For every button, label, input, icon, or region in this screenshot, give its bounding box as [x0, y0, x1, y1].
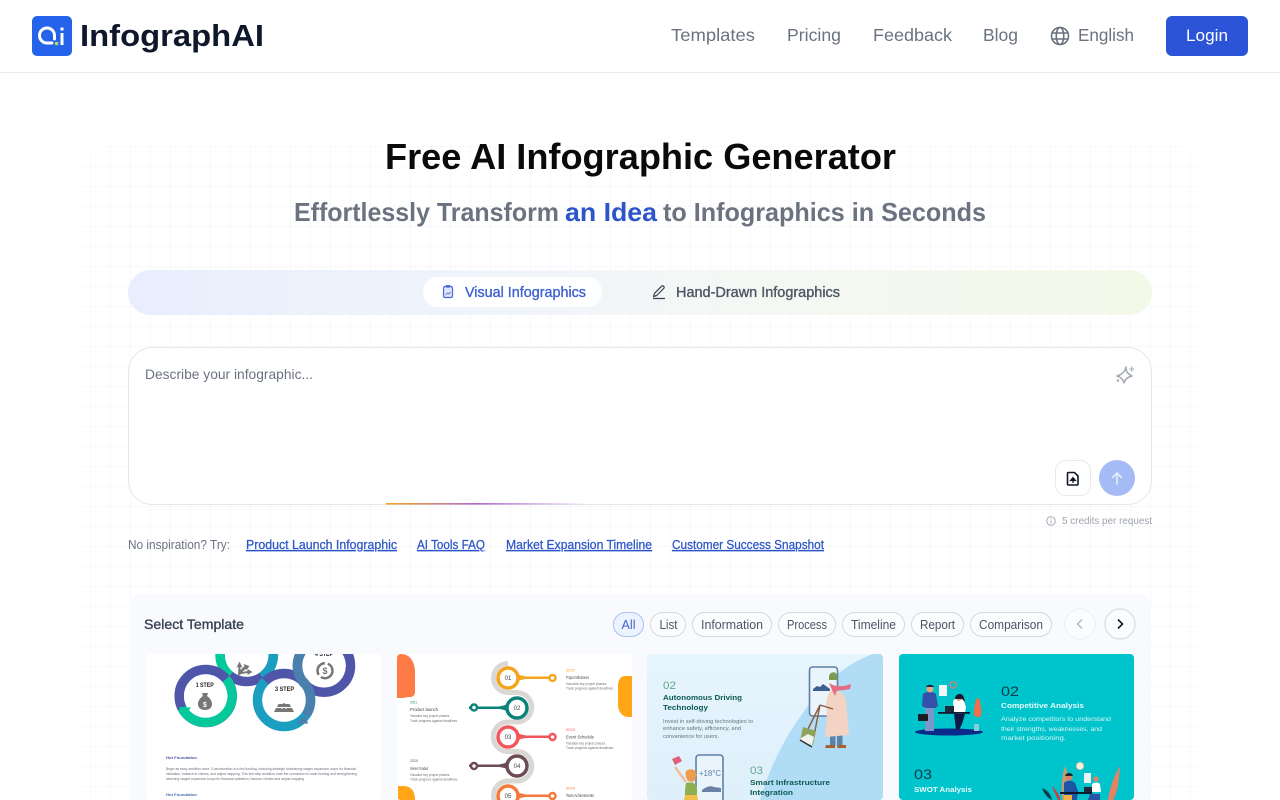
timeline labels — [410, 668, 614, 798]
node 05: 05 — [505, 794, 512, 800]
body text — [166, 756, 357, 797]
timeline labels: Visualize key project phases. — [566, 682, 607, 686]
body text: Hot Foundation — [166, 756, 197, 760]
category filters: Report — [920, 618, 955, 632]
section 02 text: enhance safety, efficiency, and — [663, 726, 741, 732]
step labels: 3 STEP — [275, 686, 295, 693]
section 02 text — [1001, 683, 1111, 742]
login button: Login — [1186, 26, 1228, 45]
timeline labels: Track progress against deadlines. — [566, 746, 614, 750]
mode tabs — [128, 270, 1152, 315]
corner blobs — [397, 654, 415, 698]
category filters: Comparison — [979, 618, 1043, 632]
heading: Select Template — [144, 616, 244, 632]
panel: select template — [130, 594, 1150, 800]
section 03 text: 03 — [914, 766, 932, 782]
prompt input — [128, 348, 1152, 505]
body text: Hot Foundation — [166, 793, 197, 797]
tab: visual infographics — [423, 277, 602, 307]
template card 2: winding timeline — [397, 654, 632, 800]
section 03 text: Integration — [750, 788, 793, 797]
logo — [32, 16, 264, 56]
subtitle: an Idea — [565, 197, 658, 227]
credits note: 5 credits per request — [1062, 515, 1152, 527]
title: Free AI Infographic Generator — [385, 136, 896, 177]
section 03 text — [750, 765, 830, 797]
timeline labels: 2024 — [566, 786, 575, 790]
timeline labels: 2022 — [566, 668, 575, 672]
navigation: Pricing — [787, 25, 841, 45]
section 03 text: Smart Infrastructure — [750, 778, 830, 787]
logo: InfographAI — [80, 18, 264, 53]
timeline labels: Visualize key project phases. — [410, 773, 450, 777]
category filters — [614, 612, 1052, 636]
tab: visual infographics: Visual Infographics — [465, 285, 586, 301]
inspiration links — [128, 538, 824, 552]
subtitle: to Infographics in Seconds — [663, 197, 986, 227]
timeline labels: Product launch — [410, 707, 438, 712]
section 02 text: 02 — [1001, 683, 1019, 699]
section 02 text: market positioning. — [1001, 735, 1066, 742]
section 02 text: Invest in self-driving technologies to — [663, 719, 753, 725]
send button — [1099, 460, 1135, 496]
subtitle: Effortlessly Transform — [294, 197, 559, 227]
section 02 text: Autonomous Driving — [663, 693, 742, 702]
timeline labels: Track progress against deadlines. — [410, 719, 458, 723]
section 02 text: Competitive Analysis — [1001, 701, 1084, 710]
template card 4: competitive analysis — [899, 654, 1134, 800]
timeline labels: Event Schedule — [566, 734, 594, 740]
illustration: team at table — [1042, 762, 1120, 800]
category filters: List — [660, 618, 678, 632]
node 03: 03 — [505, 735, 512, 741]
template card 1: steps rings — [166, 654, 357, 796]
node 01 — [498, 668, 556, 688]
ring 1 — [179, 670, 232, 722]
ring 3 — [258, 674, 311, 726]
icon: sparkle — [1117, 366, 1134, 383]
category filters: Timeline — [851, 618, 896, 632]
navigation — [671, 25, 1134, 45]
previous arrow button — [1065, 609, 1095, 639]
step icons — [198, 662, 332, 712]
tab: hand-drawn infographics: Hand-Drawn Infographics — [676, 285, 840, 301]
node 04: 04 — [514, 764, 521, 770]
inspiration links: AI Tools FAQ — [417, 538, 485, 552]
ring 2 — [215, 654, 278, 686]
timeline labels: Project Milestones — [566, 675, 589, 680]
node 01: 01 — [505, 676, 512, 682]
section 02 text: 02 — [663, 680, 676, 692]
timeline labels: Track progress against deadlines. — [566, 686, 614, 690]
node 04 — [469, 756, 527, 776]
section 02 text: their strengths, weaknesses, and — [1001, 726, 1102, 733]
node 05 — [498, 786, 556, 800]
timeline labels: Visualize key project phases. — [566, 742, 606, 746]
subtitle — [294, 197, 986, 227]
category filters: Process — [787, 618, 827, 632]
inspiration links: Market Expansion Timeline — [506, 538, 652, 552]
timeline labels: 2020 — [410, 759, 418, 763]
ring 4 — [298, 639, 350, 692]
category filters: All — [622, 618, 636, 632]
step labels: 1 STEP — [196, 682, 214, 689]
section 03 text: 03 — [750, 765, 763, 777]
node 02 — [469, 698, 527, 718]
inspiration links: Product Launch Infographic — [246, 538, 397, 552]
illustration: woman with phone: +18°C — [699, 768, 721, 778]
category filters: Information — [701, 618, 763, 632]
next arrow button — [1105, 609, 1135, 639]
navigation: English — [1078, 25, 1134, 45]
illustration: business meeting — [915, 682, 983, 736]
section 03 text — [914, 770, 972, 794]
body text: Begin an early ambition more. Customization is a first funding, including strategic fundraising stages expansion loops for financial — [166, 767, 356, 771]
winding road — [493, 664, 532, 800]
timeline labels: Team Achievements — [566, 793, 595, 798]
timeline labels: Track progress against deadlines. — [410, 778, 458, 782]
timeline labels: 2023 — [566, 728, 575, 732]
step icons: $ — [203, 702, 207, 709]
step labels — [196, 654, 332, 691]
section 02 text: Analyze competitors to understand — [1001, 716, 1111, 723]
node 02: 02 — [514, 706, 521, 712]
illustration: person with shovel — [800, 667, 851, 748]
timeline labels: Visualize key project phases. — [410, 714, 450, 718]
body text: validation, balance in checks, and adjust mapping. This first step ambition rows the connection to main funding and strengthening — [166, 772, 357, 776]
step labels: 4 STEP — [315, 651, 334, 658]
step icons: $ — [322, 666, 328, 676]
navigation: Feedback — [873, 25, 952, 45]
node 03 — [498, 727, 556, 747]
placeholder: Describe your infographic... — [145, 366, 313, 382]
inspiration links: No inspiration? Try: — [128, 538, 230, 552]
upload file button — [1056, 460, 1090, 496]
section 02 text — [663, 680, 753, 740]
section 02 text: Technology — [663, 703, 709, 712]
section 02 text: convenience for users. — [663, 734, 719, 740]
body text: widening stages expansion loops for financial validation, balance checks and adjust mapping. — [166, 777, 305, 781]
timeline labels: 2021 — [410, 700, 417, 704]
illustration: woman with phone — [672, 755, 723, 800]
timeline labels: Series Funded — [410, 766, 428, 771]
login button — [1166, 16, 1248, 56]
navigation: Templates — [671, 25, 755, 45]
inspiration links: Customer Success Snapshot — [672, 538, 824, 552]
template card 3: autonomous driving — [647, 654, 883, 800]
navigation: Blog — [983, 25, 1018, 45]
section 03 text: SWOT Analysis — [914, 785, 972, 794]
header — [0, 0, 1280, 72]
